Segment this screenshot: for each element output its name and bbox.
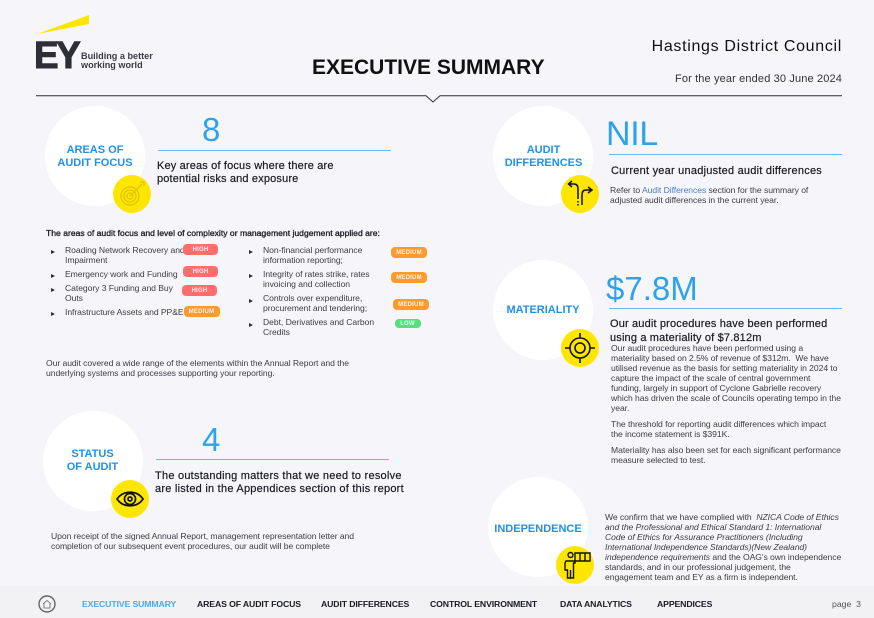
rule xyxy=(609,154,842,155)
NIL figure: NIL xyxy=(606,115,658,153)
right column items: Non-financial performance xyxy=(263,245,362,255)
status note: completion of our subsequent event procedures, our audit will be complete xyxy=(51,541,330,551)
icon: target xyxy=(112,175,150,213)
threshold paragraph: the income statement is $391K. xyxy=(611,429,730,439)
description: Refer to Audit Differences section for the summary of xyxy=(610,185,808,195)
left column badges: HIGH xyxy=(192,288,207,294)
footer navigation xyxy=(0,586,874,618)
right column items: Debt, Derivatives and Carbon xyxy=(263,317,374,327)
independence statement: and the Professional and Ethical Standard 1: International xyxy=(605,522,821,532)
panel: audit focus list xyxy=(46,228,429,378)
number 8: 8 xyxy=(202,111,220,148)
subheading: The outstanding matters that we need to resolve xyxy=(155,470,402,482)
subheading xyxy=(157,160,334,185)
performance measure paragraph xyxy=(611,445,841,465)
left column items xyxy=(51,245,185,317)
left column items: Impairment xyxy=(65,255,107,265)
independence statement: We confirm that we have complied with NZICA Code of Ethics xyxy=(605,512,839,522)
heading xyxy=(67,448,118,473)
right column badges: LOW xyxy=(400,321,415,327)
number 4: 4 xyxy=(202,421,220,458)
rule xyxy=(158,150,391,151)
body paragraph xyxy=(611,343,841,413)
logo strapline xyxy=(81,51,153,70)
$7.8M figure: $7.8M xyxy=(606,270,698,307)
heading xyxy=(505,144,582,169)
icon: home xyxy=(38,595,56,613)
left column badges: HIGH xyxy=(193,269,208,275)
performance measure paragraph: measure selected to test. xyxy=(611,455,706,465)
subheading: Our audit procedures have been performed xyxy=(610,318,827,330)
logo beam xyxy=(37,15,89,34)
logo strapline: working world xyxy=(81,60,143,70)
status note: Upon receipt of the signed Annual Report, management representation letter and xyxy=(51,531,354,541)
subheading: are listed in the Appendices section of this report xyxy=(155,483,404,495)
circle xyxy=(493,106,593,206)
subheading: Current year unadjusted audit differences xyxy=(611,165,822,177)
right column items: Controls over expenditure, xyxy=(263,293,362,303)
logo strapline: Building a better xyxy=(81,51,153,61)
independence statement: engagement team and EY as a firm is independent. xyxy=(605,572,798,582)
period: For the year ended 30 June 2024 xyxy=(675,73,842,85)
independence statement xyxy=(605,512,841,582)
left column items: Outs xyxy=(65,293,83,303)
heading: INDEPENDENCE xyxy=(494,523,582,535)
left column items: Roading Network Recovery and xyxy=(65,245,185,255)
status note xyxy=(51,531,354,551)
page number: page 3 xyxy=(832,599,861,609)
independence statement: International Independence Standards)(New Zealand) xyxy=(605,542,807,552)
panel: independence xyxy=(488,477,841,584)
subheading: using a materiality of $7.812m xyxy=(610,332,762,344)
title: EXECUTIVE SUMMARY xyxy=(312,56,545,79)
left column badges xyxy=(182,244,220,317)
header rule with notch xyxy=(36,95,842,103)
panel: areas of audit focus xyxy=(45,106,391,213)
right column items: information reporting; xyxy=(263,255,343,265)
body paragraph: funding, largely in support of Cyclone Gabrielle recovery xyxy=(611,383,821,393)
panel: status of audit xyxy=(43,411,404,551)
icon: eye xyxy=(110,480,148,518)
right column items: invoicing and collection xyxy=(263,279,350,289)
heading: DIFFERENCES xyxy=(505,157,582,169)
right column badges: MEDIUM xyxy=(398,302,424,308)
coverage note: Our audit covered a wide range of the elements within the Annual Report and the xyxy=(46,358,349,368)
item: non-financial xyxy=(249,250,253,254)
circle xyxy=(43,411,143,511)
body paragraph: which has driven the scale of Councils operating tempo in the xyxy=(611,393,841,403)
nav: control environment: CONTROL ENVIRONMENT xyxy=(430,599,537,609)
right column items: Credits xyxy=(263,327,290,337)
body paragraph: utilised revenue as the basis for setting materiality in 2024 to xyxy=(611,363,837,373)
heading: AREAS OF xyxy=(67,144,123,156)
performance measure paragraph: Materiality has also been set for each significant performance xyxy=(611,445,841,455)
coverage note xyxy=(46,358,349,378)
body paragraph: year. xyxy=(611,403,629,413)
right column badges xyxy=(391,247,429,328)
left column items: Category 3 Funding and Buy xyxy=(65,283,173,293)
icon: person with flag xyxy=(556,546,594,584)
body paragraph: Our audit procedures have been performed using a xyxy=(611,343,803,353)
heading: AUDIT FOCUS xyxy=(57,157,133,169)
right column badges: MEDIUM xyxy=(396,275,422,281)
left column badges: HIGH xyxy=(193,247,208,253)
coverage note: underlying systems and processes supporting your reporting. xyxy=(46,368,275,378)
right column badges: MEDIUM xyxy=(396,250,422,256)
subheading: potential risks and exposure xyxy=(157,173,298,185)
nav: data analytics: DATA ANALYTICS xyxy=(560,599,632,609)
nav: appendices: APPENDICES xyxy=(657,599,712,609)
body paragraph: capture the impact of the scale of central government xyxy=(611,373,810,383)
heading: AUDIT xyxy=(527,144,560,156)
right column items: Integrity of rates strike, rates xyxy=(263,269,370,279)
icon: diverging arrows xyxy=(561,175,599,213)
description: adjusted audit differences in the current year. xyxy=(610,195,779,205)
heading: OF AUDIT xyxy=(67,461,118,473)
heading xyxy=(57,144,133,169)
client name: Hastings District Council xyxy=(652,38,842,55)
independence statement: independence requirements and the OAG's own independence xyxy=(605,552,841,562)
threshold paragraph xyxy=(611,419,826,439)
heading: STATUS xyxy=(71,448,114,460)
panel: audit differences xyxy=(493,106,842,213)
item: roading xyxy=(51,250,55,254)
independence statement: standards, and in our professional judgement, the xyxy=(605,562,791,572)
left column items: Infrastructure Assets and PP&E xyxy=(65,307,184,317)
rule xyxy=(156,458,389,460)
icon: crosshair xyxy=(560,329,598,367)
nav: executive summary: EXECUTIVE SUMMARY xyxy=(82,599,176,609)
threshold paragraph: The threshold for reporting audit differences which impact xyxy=(611,419,826,429)
subheading: Key areas of focus where there are xyxy=(157,160,334,172)
subheading xyxy=(155,470,404,495)
right column items: procurement and tendering; xyxy=(263,303,367,313)
body paragraph: materiality based on 2.5% of revenue of $312m. We have xyxy=(611,353,829,363)
independence statement: Code of Ethics for Assurance Practitioners (Including xyxy=(605,532,803,542)
left column badges: MEDIUM xyxy=(189,309,214,315)
circle xyxy=(488,477,588,577)
rule xyxy=(609,308,842,309)
description xyxy=(610,185,808,205)
circle xyxy=(493,260,593,360)
logo letters EY: EY xyxy=(34,35,78,77)
nav: areas of audit focus: AREAS OF AUDIT FOCUS xyxy=(197,599,301,609)
list heading: The areas of audit focus and level of complexity or management judgement applied are: xyxy=(46,228,380,238)
circle xyxy=(45,106,145,206)
right column items xyxy=(249,245,374,337)
left column items: Emergency work and Funding xyxy=(65,269,178,279)
heading: MATERIALITY xyxy=(506,304,580,316)
nav: audit differences: AUDIT DIFFERENCES xyxy=(321,599,409,609)
logo: EY Building a better working world xyxy=(34,15,153,77)
subheading xyxy=(610,318,827,344)
panel: materiality xyxy=(493,260,842,465)
